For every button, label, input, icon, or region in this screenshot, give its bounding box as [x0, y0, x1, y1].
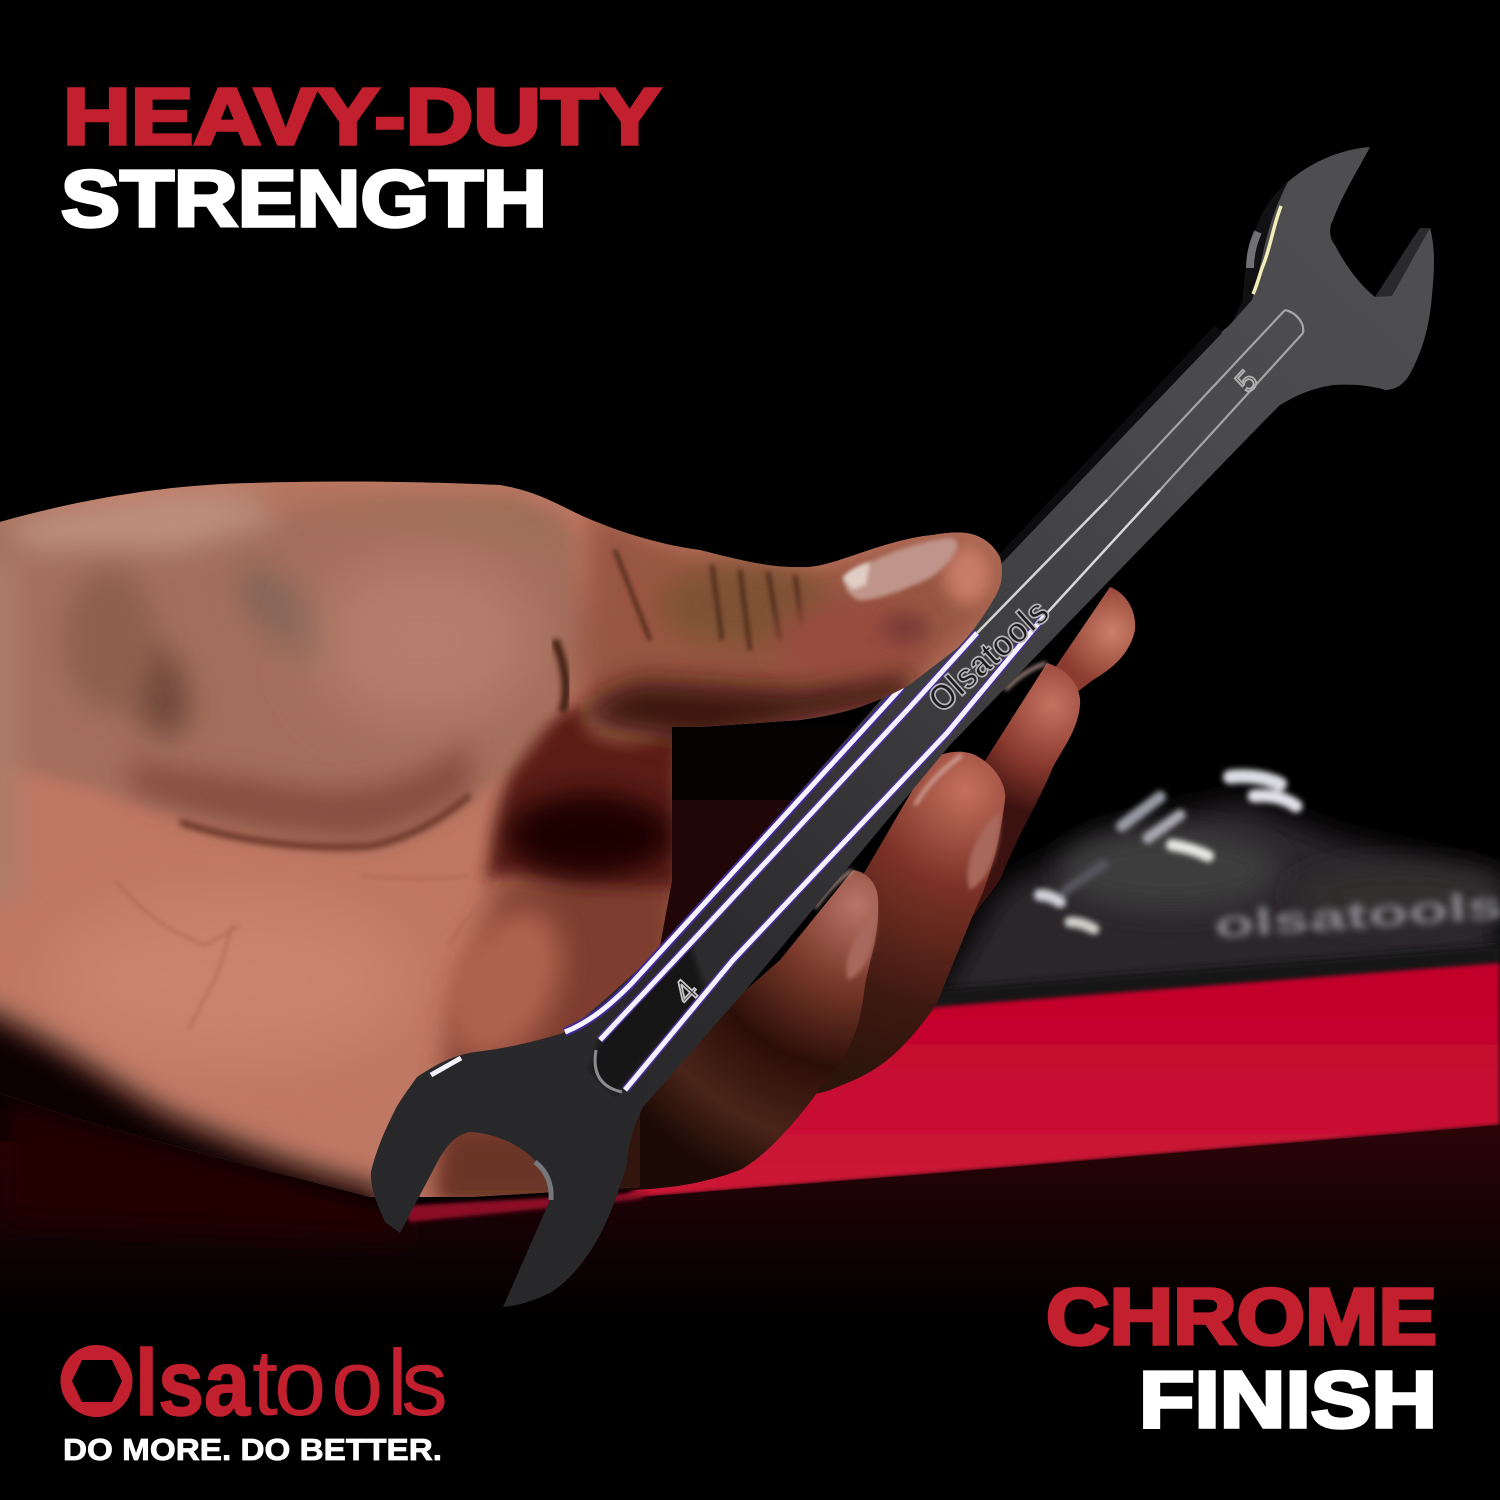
upper head bevel and glint [1232, 178, 1290, 322]
left wrist column [0, 560, 20, 900]
icon: hexagon O [61, 1345, 133, 1417]
shadowed palm behind wrench [640, 800, 800, 970]
band between palm and fingers [485, 705, 680, 890]
finger 4 [620, 870, 878, 1190]
bright slot lines [600, 633, 977, 1040]
headline: heavy-duty strength [61, 72, 661, 243]
top edge sheen [0, 488, 280, 550]
red strip under jaw [400, 1192, 650, 1222]
jaw gap skin [440, 1135, 560, 1200]
vein shadow [232, 561, 322, 660]
engraved size 5: 5 [1229, 364, 1265, 399]
finger nail glints [815, 663, 1046, 908]
thumb body [572, 516, 1002, 727]
hand illustration [0, 482, 1136, 1197]
thumb tip over wrench [840, 532, 1002, 713]
finger 3 [790, 752, 1005, 1093]
palm fade to shadow [0, 993, 375, 1197]
thumb lower shadow [590, 665, 915, 745]
slot line bottom [1160, 310, 1303, 490]
case top [930, 800, 1500, 1010]
thumb red side [775, 602, 925, 678]
palm creases [126, 892, 238, 1028]
thumb knuckle tan [660, 563, 830, 647]
dark shaft bevel [975, 325, 1222, 583]
palm and back of hand [0, 482, 1002, 1197]
palm highlight [74, 912, 386, 1048]
finish: FINISH [1139, 1355, 1437, 1444]
mound lower shade [130, 740, 470, 838]
lower palm dark blend near finger [619, 1114, 640, 1188]
bright edge highlight [565, 687, 902, 1032]
finger 4 nail [847, 912, 876, 980]
chrome: CHROME [1046, 1272, 1437, 1361]
thumbnail [843, 538, 957, 600]
floor glow [0, 1125, 1500, 1340]
left dark floor [0, 1093, 420, 1240]
logo text light: tools [252, 1330, 448, 1435]
logo: Olsatools [61, 1330, 448, 1467]
knuckle wrinkles [615, 550, 802, 650]
jaw inner bevel [1375, 228, 1430, 297]
finger 2 [940, 663, 1080, 960]
slot line top [1107, 310, 1285, 500]
thumb tip highlight [944, 545, 992, 605]
index mound [452, 900, 574, 1056]
wrench [371, 147, 1434, 1307]
slot fill lower [590, 945, 705, 1095]
back of hand mound [0, 510, 600, 848]
engraved brand name: Olsatools [920, 591, 1057, 720]
finger 3 nail [968, 812, 1000, 890]
cusp between mound and thumb [555, 640, 566, 712]
black gap between thumb and fingers [660, 727, 860, 805]
heavy-duty: HEAVY-DUTY [63, 72, 661, 161]
index mound base [430, 870, 680, 1200]
mound crease [180, 795, 470, 847]
head glint [431, 1058, 461, 1075]
wrench body [371, 147, 1434, 1307]
mound highlight [315, 555, 535, 725]
strength: STRENGTH [61, 154, 547, 243]
tagline: DO MORE. DO BETTER. [63, 1432, 442, 1467]
red foam band [620, 963, 1500, 1199]
blurred wrench reflections [1040, 776, 1296, 929]
logo text bold: lsa [135, 1330, 251, 1435]
finger 1 [1040, 587, 1135, 705]
scene: blurred tool case [620, 776, 1500, 1199]
blurred case logo: olsatools [1213, 885, 1500, 947]
jaw inner highlight [535, 1162, 551, 1200]
engraved size 4: 4 [666, 972, 706, 1012]
headline: chrome finish [1046, 1272, 1437, 1444]
